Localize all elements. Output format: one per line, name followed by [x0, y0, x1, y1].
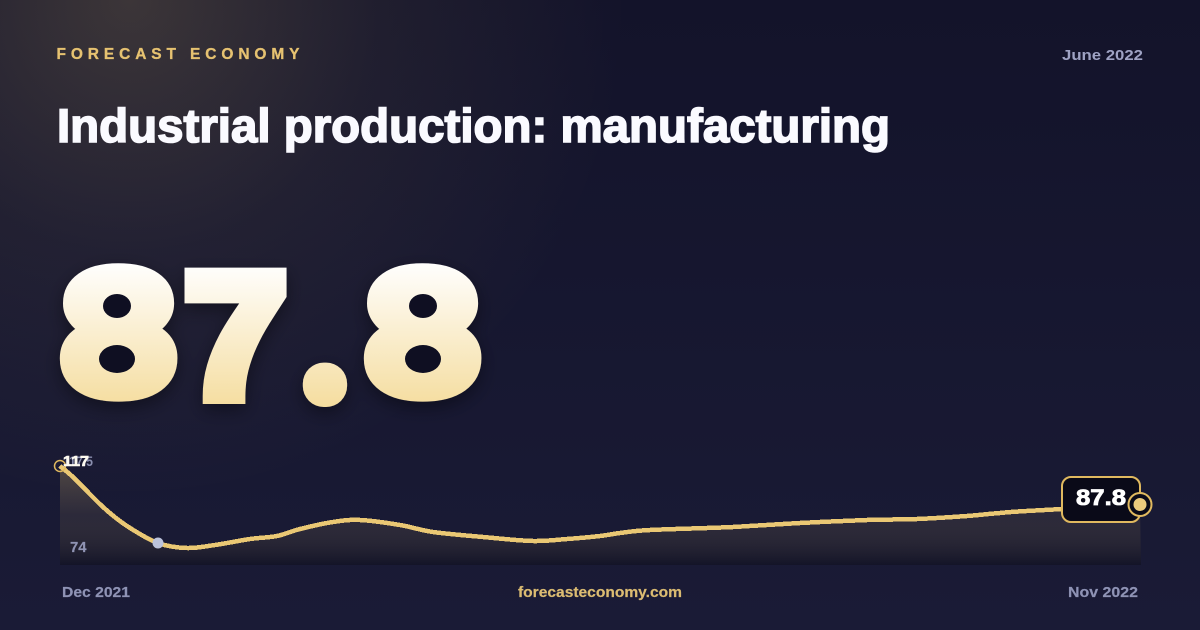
big value: 8 [368, 237, 477, 427]
end date: Nov 2022 [1068, 585, 1138, 601]
end marker [1128, 493, 1152, 516]
min marker [152, 538, 164, 548]
axis min label: 74 [70, 540, 86, 556]
website: forecasteconomy.com [518, 585, 682, 601]
start date: Dec 2021 [62, 585, 130, 601]
big value: 7 [185, 237, 286, 433]
date: June 2022 [1062, 47, 1143, 64]
area under line [60, 466, 1141, 565]
line [60, 466, 1140, 548]
start marker [54, 460, 66, 472]
end value badge: 87.8 [1076, 485, 1126, 510]
big value: 8 [64, 237, 173, 427]
sparkline chart [54, 453, 1152, 565]
start value label: 117 [63, 453, 89, 470]
brand label: FORECAST ECONOMY [56, 46, 300, 63]
big value: . [323, 373, 327, 390]
big value [64, 237, 477, 433]
axis max label: 117.5 [63, 453, 93, 469]
end value badge [1062, 477, 1140, 522]
title: Industrial production: manufacturing [57, 99, 890, 152]
